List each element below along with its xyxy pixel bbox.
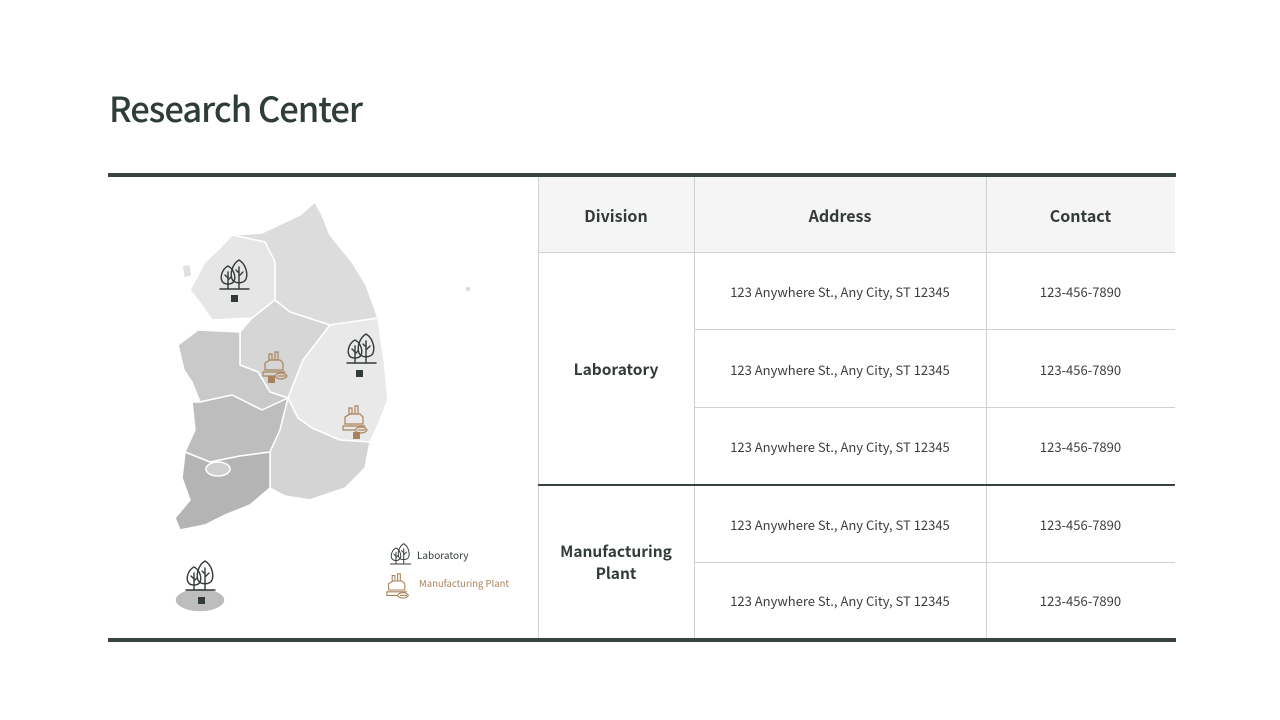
icon: factory southeast [343, 406, 367, 439]
rows: 123 Anywhere St., Any City, ST 12345 [730, 282, 950, 300]
table: 123-456-7890 [1040, 591, 1121, 610]
division: Manufacturing Plant [560, 540, 672, 584]
top rule [108, 173, 1176, 177]
division: Manufacturing Plant: Manufacturing [560, 540, 672, 562]
icon: laboratory Gyeonggi [220, 260, 249, 302]
table: 123-456-7890 [1040, 282, 1121, 300]
table: Address [809, 202, 871, 226]
table: 123 Anywhere St., Any City, ST 12345 [730, 437, 950, 456]
header row: Division [584, 202, 648, 226]
header row [538, 177, 694, 252]
legend [387, 544, 509, 598]
icon: laboratory east [347, 334, 376, 377]
table: 123 Anywhere St., Any City, ST 12345 [730, 360, 950, 378]
table: Contact [1050, 202, 1111, 226]
icon: factory central [263, 352, 287, 383]
title: Research Center [109, 82, 362, 132]
table: 123-456-7890 [1040, 360, 1121, 378]
table: 123-456-7890 [1040, 515, 1121, 534]
legend: Laboratory [417, 547, 469, 562]
table: 123 Anywhere St., Any City, ST 12345 [730, 515, 950, 534]
table [538, 177, 1175, 638]
table: 123 Anywhere St., Any City, ST 12345 [730, 591, 950, 610]
map: Korea regions [175, 202, 471, 612]
map panel [176, 203, 509, 612]
division: Manufacturing Plant: Plant [596, 562, 636, 584]
icon: laboratory Jeju [186, 561, 215, 604]
division: Laboratory: Laboratory [574, 358, 658, 380]
legend: Manufacturing Plant [419, 576, 509, 590]
bottom rule [108, 638, 1176, 642]
table: 123-456-7890 [1040, 437, 1121, 456]
